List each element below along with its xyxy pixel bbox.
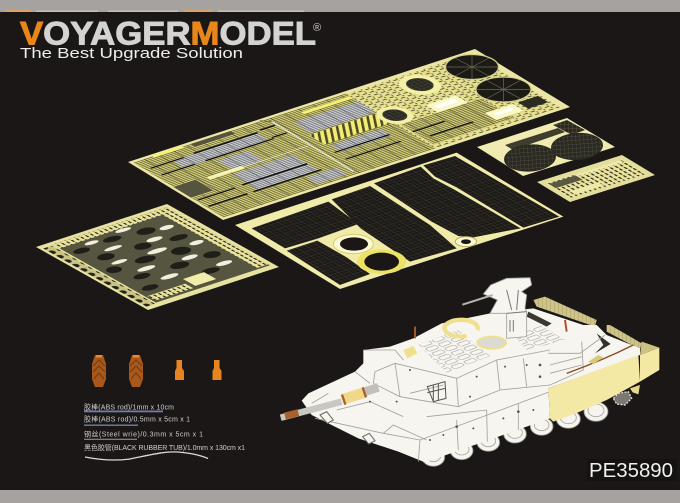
ABS rod 0.5mm sample bbox=[84, 424, 138, 426]
tank illustration bbox=[281, 278, 659, 466]
resin part: small tip 2 bbox=[212, 360, 222, 380]
sleeve rings bbox=[342, 387, 366, 405]
tagline: The Best Upgrade Solution bbox=[20, 45, 243, 62]
smoke grenade block bbox=[427, 382, 446, 402]
bottom grey band bbox=[0, 490, 680, 503]
rear rack right bbox=[607, 325, 642, 349]
resin part: right barrel bbox=[129, 355, 143, 387]
rear engine grille bbox=[595, 333, 611, 353]
ring 2 bbox=[357, 249, 406, 274]
mesh photo-etch fret bbox=[235, 153, 563, 289]
left photo-etch fret bbox=[36, 204, 279, 310]
rear deck grille bbox=[527, 312, 552, 327]
top grey band bbox=[0, 0, 680, 12]
rear yellow plate bbox=[640, 348, 659, 382]
gear ring upper bbox=[390, 71, 450, 98]
disc right bbox=[551, 132, 603, 161]
steel wire sample bbox=[84, 439, 137, 440]
sensor mount detail bbox=[507, 290, 527, 332]
gun barrel bbox=[281, 402, 342, 418]
product code: PE35890 bbox=[589, 460, 673, 482]
small fret with two discs bbox=[477, 118, 615, 176]
mesh panel: right bbox=[423, 156, 559, 228]
gear ring lower bbox=[369, 103, 421, 127]
rivets bbox=[369, 364, 541, 441]
rubber tube label: 黑色胶管(BLACK RUBBER TUB)/1.0mm x 130cm x1 bbox=[84, 443, 245, 452]
ABS rod 1mm label: 胶棒(ABS rod)/1mm x 10cm bbox=[84, 402, 174, 412]
right section detail bbox=[346, 53, 560, 148]
small fret with parts bbox=[537, 155, 655, 202]
yellow C ring bbox=[444, 320, 478, 336]
mid barrel bbox=[365, 387, 378, 392]
ring 1 bbox=[333, 234, 373, 254]
rust antennas bbox=[415, 320, 567, 338]
mesh panel: centre bbox=[332, 186, 457, 262]
glacis vision block right bbox=[363, 433, 375, 444]
mesh panel: upper left bbox=[252, 202, 358, 248]
resin part: left barrel bbox=[92, 355, 106, 387]
thermal sleeve bbox=[343, 392, 365, 399]
logo: Voyager Model: ® bbox=[313, 22, 321, 34]
large photo-etch fret bbox=[128, 49, 570, 220]
glacis vision block left bbox=[320, 412, 333, 423]
legend: parts list bbox=[84, 402, 245, 460]
small ring bbox=[455, 237, 477, 247]
side skirt yellow plate bbox=[548, 355, 640, 422]
muzzle bbox=[285, 413, 298, 416]
rear plate top bbox=[640, 342, 659, 355]
yellow patch bbox=[403, 346, 417, 358]
disc left bbox=[504, 143, 556, 173]
rear deck yellow blocks bbox=[588, 355, 603, 364]
mesh panel: lower left bbox=[287, 241, 370, 285]
turret sensor mount bbox=[483, 278, 532, 338]
rear wire bbox=[567, 345, 633, 373]
sensor gun bbox=[462, 295, 493, 305]
hull and turret silhouette bbox=[302, 308, 640, 462]
panel lines bbox=[312, 335, 605, 462]
ABS rod 0.5mm label: 胶棒(ABS rod)/0.5mm x 5cm x 1 bbox=[84, 414, 190, 424]
sprocket bbox=[613, 392, 632, 405]
fan disc 2 bbox=[476, 77, 531, 102]
mesh panel: centre right bbox=[374, 167, 521, 237]
ABS rod 1mm sample bbox=[84, 410, 163, 412]
roof hatches right bbox=[513, 325, 565, 350]
rubber tube sample bbox=[85, 452, 208, 460]
resin part: small tip 1 bbox=[175, 360, 184, 380]
rear rack left bbox=[533, 297, 597, 327]
road wheels bbox=[422, 402, 608, 466]
fan disc 1 bbox=[446, 54, 498, 80]
roof hatches left bbox=[418, 330, 490, 373]
yellow hatch ring bbox=[477, 337, 506, 349]
logo: Voyager Model: VOYAGER MODEL bbox=[20, 16, 316, 52]
rear plate lower tab bbox=[630, 385, 640, 394]
steel wire label: 钢丝(Steel wrie)/0.3mm x 5cm x 1 bbox=[84, 430, 203, 438]
